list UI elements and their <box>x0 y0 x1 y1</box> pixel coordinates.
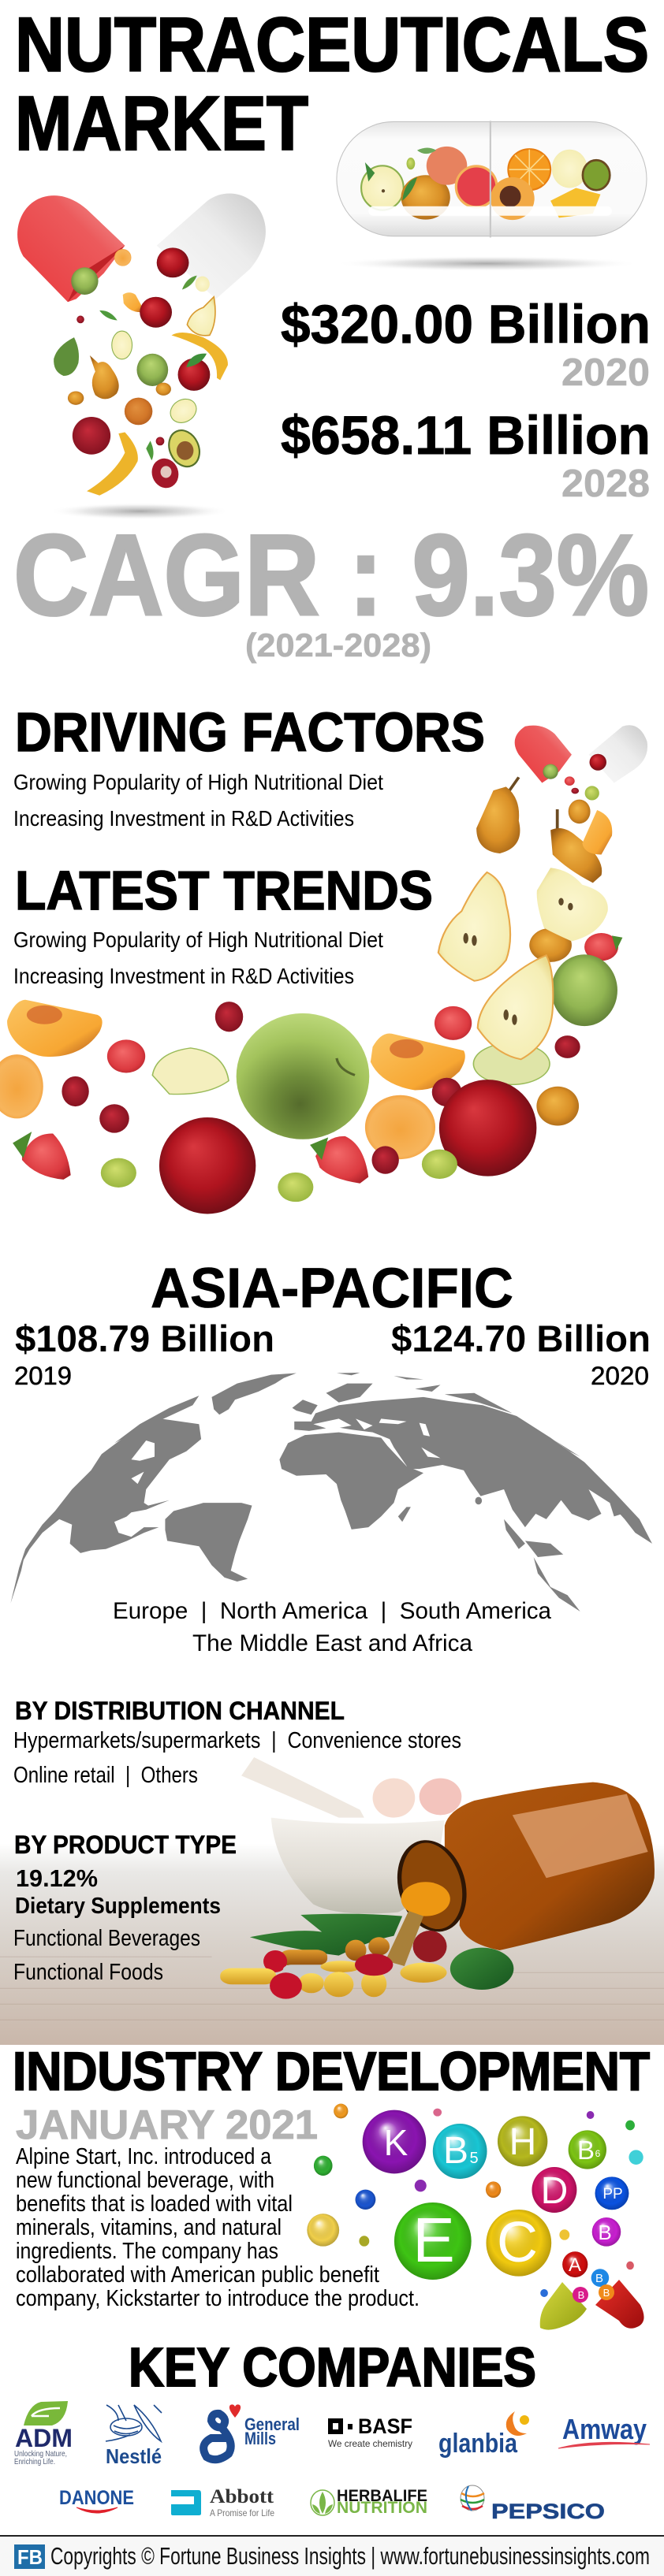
text block: industry development description: benefits that is loaded with vital <box>16 2191 293 2217</box>
illustration: vitamin spheres: PP <box>602 2186 623 2202</box>
text block: industry development description <box>16 2144 420 2311</box>
panel: driving factors <box>13 701 485 831</box>
title <box>15 2 649 166</box>
logo: ADM: Unlocking Nature, <box>14 2449 67 2459</box>
stat: Asia-Pacific 2019 <box>14 1318 274 1390</box>
illustration: vitamin spheres: 6 <box>595 2148 601 2159</box>
logo: glanbia: glanbia <box>438 2429 518 2459</box>
logo: Abbott: A Promise for Life <box>210 2507 274 2518</box>
logo: ADM <box>14 2401 73 2466</box>
panel: by distribution channel <box>13 1697 461 1788</box>
panel: by product type: Functional Beverages <box>13 1926 200 1951</box>
illustration: vitamin spheres: A <box>569 2254 581 2276</box>
logo: Herbalife Nutrition: NUTRITION <box>337 2499 427 2517</box>
panel: latest trends: Increasing Investment in R&D Activities <box>13 964 354 988</box>
logo: Nestle <box>106 2405 162 2468</box>
stat: Asia-Pacific 2019: $108.79 Billion <box>15 1318 274 1359</box>
stat: 2020 market value: 2020 <box>561 351 650 394</box>
icon: vitamin capsule halves <box>540 2280 644 2330</box>
title: MARKET <box>15 80 308 166</box>
illustration: open capsule releasing fruit <box>17 193 266 520</box>
logo: Herbalife Nutrition <box>311 2487 427 2517</box>
panel: by distribution channel: Online retail | Others <box>13 1763 198 1788</box>
panel: driving factors: DRIVING FACTORS <box>15 701 485 763</box>
logo: Danone: DANONE <box>59 2487 134 2509</box>
stat: 2028 market value: $658.11 Billion <box>281 405 651 466</box>
illustration: vitamin spheres: B <box>443 2130 468 2172</box>
logo: PepsiCo <box>461 2485 605 2523</box>
list: other regions: The Middle East and Africa <box>192 1630 472 1656</box>
logo: General Mills: Mills <box>244 2429 276 2448</box>
illustration: vitamin spheres: B <box>603 2287 610 2299</box>
stat: 2020 market value: $320.00 Billion <box>281 294 651 355</box>
illustration: vitamin spheres: B <box>578 2289 584 2301</box>
logo: ADM: ADM <box>15 2424 73 2452</box>
illustration: vitamin spheres <box>307 2104 644 2330</box>
footer <box>0 2535 664 2576</box>
panel: by product type: Functional Foods <box>13 1960 163 1985</box>
logo: glanbia <box>438 2411 529 2459</box>
stat: Asia-Pacific 2019: 2019 <box>14 1362 72 1390</box>
list: other regions: Europe | North America | South America <box>113 1598 551 1624</box>
panel: by product type: Dietary Supplements <box>15 1894 221 1919</box>
panel: latest trends <box>13 860 433 988</box>
panel: latest trends: Growing Popularity of High Nutritional Diet <box>13 927 383 952</box>
icon: Fortune Business Insights logo: FB <box>17 2545 43 2569</box>
panel: by product type: 19.12% <box>16 1864 98 1892</box>
stat: 2028 market value <box>281 405 651 505</box>
logo: Nestle: Nestlé <box>106 2444 162 2468</box>
illustration: stream of fruit <box>0 725 647 1214</box>
stat: Asia-Pacific 2020: 2020 <box>591 1362 649 1390</box>
stat: 2028 market value: 2028 <box>561 463 650 505</box>
text block: industry development description: Alpine Start, Inc. introduced a <box>16 2144 272 2169</box>
illustration: vitamin spheres: H <box>509 2121 536 2163</box>
illustration: vitamin spheres: B <box>598 2221 612 2244</box>
panel: latest trends: LATEST TRENDS <box>15 860 433 921</box>
stat: CAGR: (2021-2028) <box>245 626 431 664</box>
text block: industry development description: company, Kickstarter to introduce the product. <box>16 2286 420 2311</box>
logo: General Mills: General <box>244 2414 300 2434</box>
panel: driving factors: Increasing Investment in R&D Activities <box>13 806 354 831</box>
illustration: vitamin spheres: E <box>412 2205 455 2275</box>
illustration: vitamin spheres: K <box>384 2122 408 2163</box>
logo: PepsiCo: PEPSICO <box>491 2500 605 2523</box>
stat: Asia-Pacific 2020 <box>391 1318 651 1390</box>
world map globe <box>10 1373 652 1611</box>
stat: 2020 market value <box>281 294 651 394</box>
logo: BASF: We create chemistry <box>328 2438 412 2449</box>
illustration: vitamin spheres: C <box>497 2211 538 2274</box>
panel: by distribution channel: BY DISTRIBUTION CHANNEL <box>15 1697 345 1725</box>
illustration: transparent capsule with fruit <box>334 121 647 271</box>
logo: Abbott: Abbott <box>210 2486 274 2507</box>
list: other regions <box>113 1598 551 1656</box>
date: January 2021: JANUARY 2021 <box>16 2102 318 2148</box>
logo: BASF <box>328 2414 412 2449</box>
logo: Herbalife Nutrition: HERBALIFE <box>337 2487 427 2505</box>
logo: Amway: Amway <box>562 2413 647 2445</box>
illustration: vitamin spheres: D <box>541 2170 568 2212</box>
text block: industry development description: minerals, vitamins, and natural <box>16 2215 282 2240</box>
illustration: vitamin spheres: B <box>577 2136 595 2165</box>
panel: driving factors: Growing Popularity of High Nutritional Diet <box>13 770 383 794</box>
stat: Asia-Pacific 2020: $124.70 Billion <box>391 1318 651 1359</box>
illustration: vitamin spheres: B <box>595 2272 603 2285</box>
heading: key companies: KEY COMPANIES <box>129 2336 536 2398</box>
illustration: vitamin spheres: 5 <box>469 2150 479 2167</box>
logo: ADM: Enriching Life. <box>14 2457 55 2466</box>
text block: industry development description: new functional beverage, with <box>16 2168 274 2193</box>
panel: by product type <box>13 1831 237 1985</box>
logo: BASF: BASF <box>358 2414 412 2438</box>
photo: supplements bottle and mortar <box>0 1678 664 2045</box>
panel: by distribution channel: Hypermarkets/supermarkets | Convenience stores <box>13 1728 461 1753</box>
panel: by product type: BY PRODUCT TYPE <box>14 1831 237 1859</box>
logo: General Mills <box>203 2404 300 2459</box>
text block: industry development description: collaborated with American public benefit <box>16 2262 379 2288</box>
text block: industry development description: ingredients. The company has <box>16 2239 278 2264</box>
logo: Abbott <box>171 2486 274 2518</box>
heading: Asia-Pacific: ASIA-PACIFIC <box>151 1258 513 1320</box>
